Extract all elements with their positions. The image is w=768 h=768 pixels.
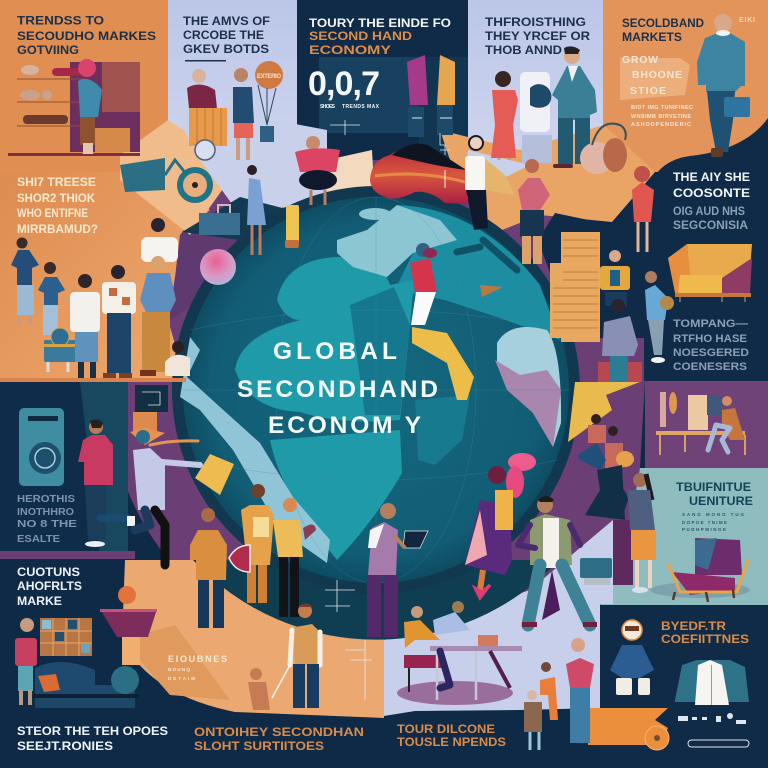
man in red with shorts: [15, 618, 37, 705]
continent: pale north: [337, 205, 457, 277]
man in red sweater: [78, 419, 135, 547]
panel: left middle heading: WHO ENTIFNE: [17, 208, 88, 220]
panel: secondhand markets heading: SECOLDBAND: [622, 16, 704, 30]
text: bottom left: STEOR THE TEH OPOES: [17, 724, 168, 738]
heading: tour: TOUSLE NPENDS: [397, 735, 506, 749]
text: left device notes: INOTHHRO: [17, 506, 74, 518]
dancer: [465, 453, 536, 598]
person C: [70, 274, 100, 378]
grow callout: BHOONE: [632, 69, 682, 81]
woman in plaid: [613, 473, 656, 593]
globe climber with slide: [410, 243, 474, 400]
panel: aims heading: GKEV BOTDS: [183, 42, 269, 56]
panel: aims heading: THE AMVS OF: [183, 14, 270, 28]
text: consumer heading: OIG AUD NHS: [673, 204, 745, 218]
furniture small text: [682, 512, 744, 532]
globe title: [237, 338, 438, 439]
woman in red dress: [491, 71, 518, 160]
text: consumer heading: [673, 170, 750, 232]
gem: [480, 285, 503, 297]
panel: secondhand markets heading: [622, 16, 704, 44]
woman in blue dress: [247, 165, 266, 255]
button pill: [688, 740, 749, 747]
panel: left middle heading: SHOR2 THIOK: [17, 193, 96, 205]
speaker device: [19, 408, 64, 486]
toolbox: [199, 205, 240, 235]
panel: trends heading: SECOUDHO MARKES: [17, 29, 156, 43]
text: left device notes: [17, 493, 77, 545]
globe title: GLOBAL: [273, 338, 397, 365]
printer: [580, 558, 612, 585]
heading: left bottom market: MARKE: [17, 594, 62, 608]
bag: [42, 328, 78, 372]
text: right notes: COENESERS: [673, 361, 747, 373]
person D: [102, 265, 136, 378]
runner: [130, 428, 200, 565]
text: left device notes: NO 8 THE: [17, 518, 77, 530]
text: left device notes: HEROTHIS: [17, 493, 75, 505]
text: bottom centre left: [194, 725, 364, 753]
heading: left bottom market: AHOFRLTS: [17, 579, 82, 593]
peach area label: DETAIM: [168, 676, 195, 681]
panel: trends heading: [17, 14, 156, 57]
crowd with clothes: [577, 414, 634, 470]
heading: tour: [397, 722, 506, 749]
continent: large teal landmass: [235, 257, 414, 560]
peach area label: EIOUBNES: [168, 654, 227, 664]
big statistic: SHOES: [320, 104, 336, 110]
panel: economy heading: SECOND HAND: [309, 29, 412, 43]
text: right notes: TOMPANG—: [673, 318, 748, 330]
grow callout: WNSIMB BIRVETINE: [631, 114, 691, 120]
text: consumer heading: SEGCONISIA: [673, 218, 748, 232]
fat woman: [295, 136, 340, 205]
panel: left middle heading: MIRRBAMUD?: [17, 224, 98, 236]
grow callout: GROW: [622, 54, 658, 66]
group of shoppers: [0, 218, 190, 382]
person G crouching: [165, 341, 190, 376]
desk scene with two people: [397, 601, 522, 705]
panel: economy heading: [309, 16, 451, 57]
icons row: [678, 713, 746, 724]
wooden crate: [550, 232, 600, 342]
grow callout: [620, 54, 693, 128]
panel: economy heading: ECONOMY: [309, 43, 391, 57]
person B: [38, 262, 65, 335]
hanging garments: [407, 55, 455, 137]
panel: left middle heading: [17, 177, 98, 236]
woman with sign and plant: EXTERIO: [257, 74, 281, 80]
text: bottom left: SEEJT.RONIES: [17, 739, 113, 753]
panel: aims heading: [183, 14, 270, 62]
man in blue: [645, 271, 674, 363]
panel: thrift heading: THOB ANND: [485, 43, 562, 57]
big statistic: TRENDS MAX: [342, 104, 380, 110]
label: corner tag: EIKI: [739, 17, 755, 24]
yellow folder: [195, 454, 234, 495]
peach area label: [168, 654, 227, 681]
man in tan top: [190, 508, 227, 628]
grow callout: STIOE: [630, 85, 666, 97]
heading: left bottom market: [17, 565, 82, 608]
continent: lower centre patch: [415, 395, 470, 465]
people beside crate: [598, 250, 642, 382]
furniture small text: PUDHPMINGE: [682, 527, 726, 532]
panel: economy heading: TOURY THE EINDE FO: [309, 16, 451, 30]
schematic sketch: [330, 120, 450, 155]
heading: furniture: UENITURE: [689, 494, 753, 508]
globe title: ECONOM Y: [268, 412, 421, 439]
person A: [11, 238, 39, 326]
man with tablet: [367, 503, 428, 637]
heading: left bottom market: CUOTUNS: [17, 565, 80, 579]
woman and children: [524, 638, 669, 750]
globe: [172, 186, 580, 594]
panel: thrift heading: [485, 15, 590, 57]
handbag: [580, 124, 627, 174]
orange armchair: [668, 244, 752, 302]
reader: [273, 498, 316, 617]
text: bottom centre left: SLOHT SURTIITOES: [194, 739, 324, 753]
text: consumer heading: THE AIY SHE: [673, 170, 750, 184]
desk scene: [656, 392, 745, 455]
text: consumer heading: COOSONTE: [673, 186, 750, 200]
furniture small text: SANG MONG TUG: [682, 512, 744, 517]
walking man with cane: [272, 604, 320, 708]
red shield: [229, 545, 250, 572]
heading: tour: TOUR DILCONE: [397, 722, 495, 736]
bicycle motor: [120, 158, 210, 200]
box stack: [133, 385, 168, 435]
continent: upper right teal: [395, 205, 560, 340]
person F: [140, 256, 176, 376]
globe title: SECONDHAND: [237, 376, 438, 403]
person with cart: [187, 69, 227, 160]
text: right notes: NOESGERED: [673, 347, 749, 359]
shopper: [78, 59, 102, 154]
continent: central shadow: [350, 287, 410, 415]
panel: thrift heading: THEY YRCEF OR: [485, 29, 590, 43]
peach area label: BOUNQ: [168, 667, 190, 672]
astronaut jacket: [610, 620, 654, 695]
text: right notes: [673, 318, 749, 373]
man with briefcase: [697, 14, 750, 157]
urn with flame: [100, 586, 157, 665]
panel: thrift heading: THFROISTHING: [485, 15, 586, 29]
panel: left middle heading: SHI7 TREESE: [17, 177, 96, 189]
person pink sweater: [518, 159, 550, 264]
heading: coefitness: BYEDF.TR: [661, 619, 726, 633]
heading: coefitness: COEFIITTNES: [661, 632, 749, 646]
woman in red at right: [632, 166, 654, 252]
panel: shop shelves with shopper: [8, 59, 140, 156]
man in teal suit: [552, 46, 597, 168]
man with book: [241, 484, 274, 603]
grow callout: BIOT IMG TUNIFINEC: [631, 105, 693, 111]
panel: trends heading: TRENDSS TO: [17, 14, 104, 28]
heading: furniture: TBUIFNITUE: [676, 480, 751, 494]
machine: [520, 72, 552, 163]
jackets: [675, 660, 749, 705]
sofa and artwork wall: [33, 618, 139, 708]
panel: secondhand markets heading: MARKETS: [622, 30, 682, 44]
grow callout: ASHODPENDERIC: [631, 122, 691, 128]
text: bottom left: [17, 724, 168, 753]
big statistic: 0,0,7: [308, 65, 380, 103]
continent: pale west strip: [180, 337, 330, 563]
purple armchair: [650, 538, 750, 602]
heading: coefitness: [661, 619, 749, 646]
yellow triangle: [568, 382, 640, 442]
text: right notes: RTFHO HASE: [673, 333, 747, 345]
text: left device notes: ESALTE: [17, 533, 60, 545]
continent: dark islands: [457, 240, 517, 270]
person E: [141, 218, 178, 262]
pink sphere: [200, 249, 236, 285]
panel: aims heading: CRCOBE THE: [183, 28, 264, 42]
woman with sign and plant: [233, 61, 283, 160]
heading: furniture: [676, 480, 753, 508]
panel: trends heading: GOTVIING: [17, 43, 79, 57]
globe grid lines: [183, 197, 569, 583]
dark coat shape: [585, 465, 625, 520]
schematic sketches: [325, 580, 372, 700]
text: bottom centre left: ONTOIHEY SECONDHAN: [194, 725, 364, 739]
woman white top: [465, 136, 515, 230]
yellow roll: [285, 205, 299, 248]
man in vest: [518, 496, 597, 627]
furniture small text: DOPOE TNIME: [682, 520, 727, 525]
continent: pale small island: [359, 208, 391, 220]
continent: pale east: [497, 327, 561, 447]
continent: mauve east: [495, 360, 561, 447]
silhouette: [248, 668, 270, 710]
red bag car: [370, 144, 467, 204]
